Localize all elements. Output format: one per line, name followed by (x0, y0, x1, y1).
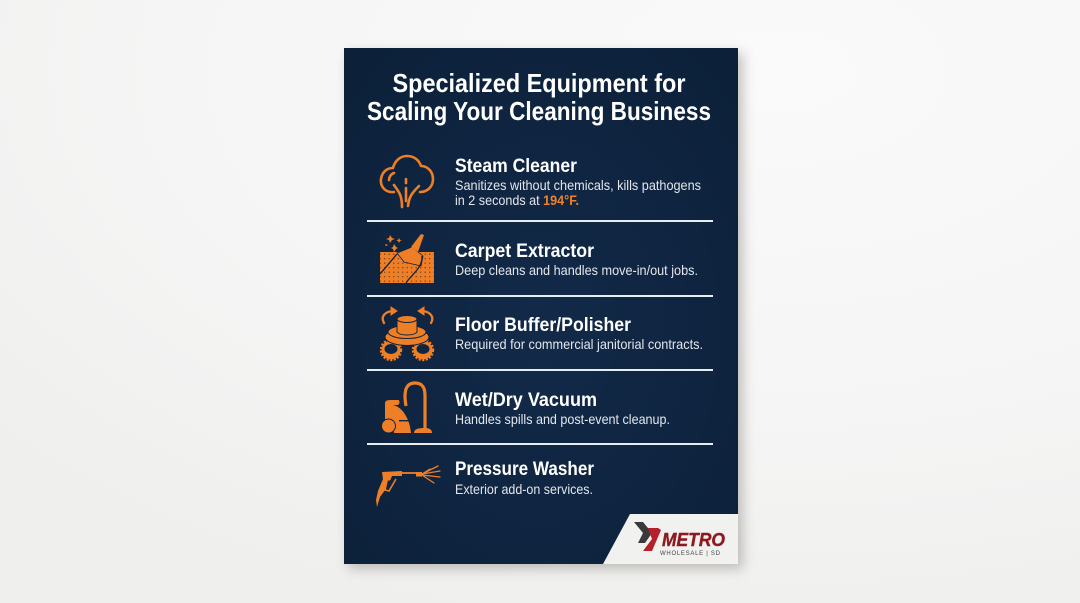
icon: steam cloud (381, 156, 433, 207)
logo text: WHOLESALE | SD (660, 551, 721, 557)
icon: logo chevrons (634, 522, 661, 551)
logo text: METRO (662, 529, 726, 550)
title: Scaling Your Cleaning Business (367, 96, 711, 126)
poster panel (344, 48, 738, 564)
item text: floor buffer: Floor Buffer/Polisher (455, 314, 631, 336)
icon: wet/dry vacuum (382, 383, 432, 433)
item text: floor buffer: Required for commercial janitorial contracts. (455, 336, 703, 352)
item text: carpet extractor: Deep cleans and handles move-in/out jobs. (455, 262, 698, 278)
item text: steam cleaner: Sanitizes without chemicals, kills pathogens (455, 177, 701, 193)
icon: carpet with brush (380, 234, 434, 283)
title (367, 68, 711, 126)
item text: carpet extractor: Carpet Extractor (455, 240, 594, 262)
title: Specialized Equipment for (392, 68, 686, 98)
item text: pressure washer: Exterior add-on services. (455, 481, 593, 497)
divider (367, 220, 713, 222)
icon: pressure washer (376, 466, 440, 507)
logo corner (603, 514, 738, 564)
item text: wet/dry vacuum: Wet/Dry Vacuum (455, 389, 597, 411)
item text: floor buffer (455, 314, 703, 352)
item text: carpet extractor (455, 240, 698, 278)
item text: wet/dry vacuum: Handles spills and post-event cleanup. (455, 411, 670, 427)
item text: wet/dry vacuum (455, 389, 670, 427)
item text: steam cleaner: in 2 seconds at 194°F. (455, 192, 579, 208)
item text: pressure washer: Pressure Washer (455, 458, 594, 480)
item text: steam cleaner: Steam Cleaner (455, 155, 577, 177)
icon: floor buffer (382, 307, 432, 360)
item text: steam cleaner (455, 155, 701, 208)
item text: pressure washer (455, 458, 594, 497)
